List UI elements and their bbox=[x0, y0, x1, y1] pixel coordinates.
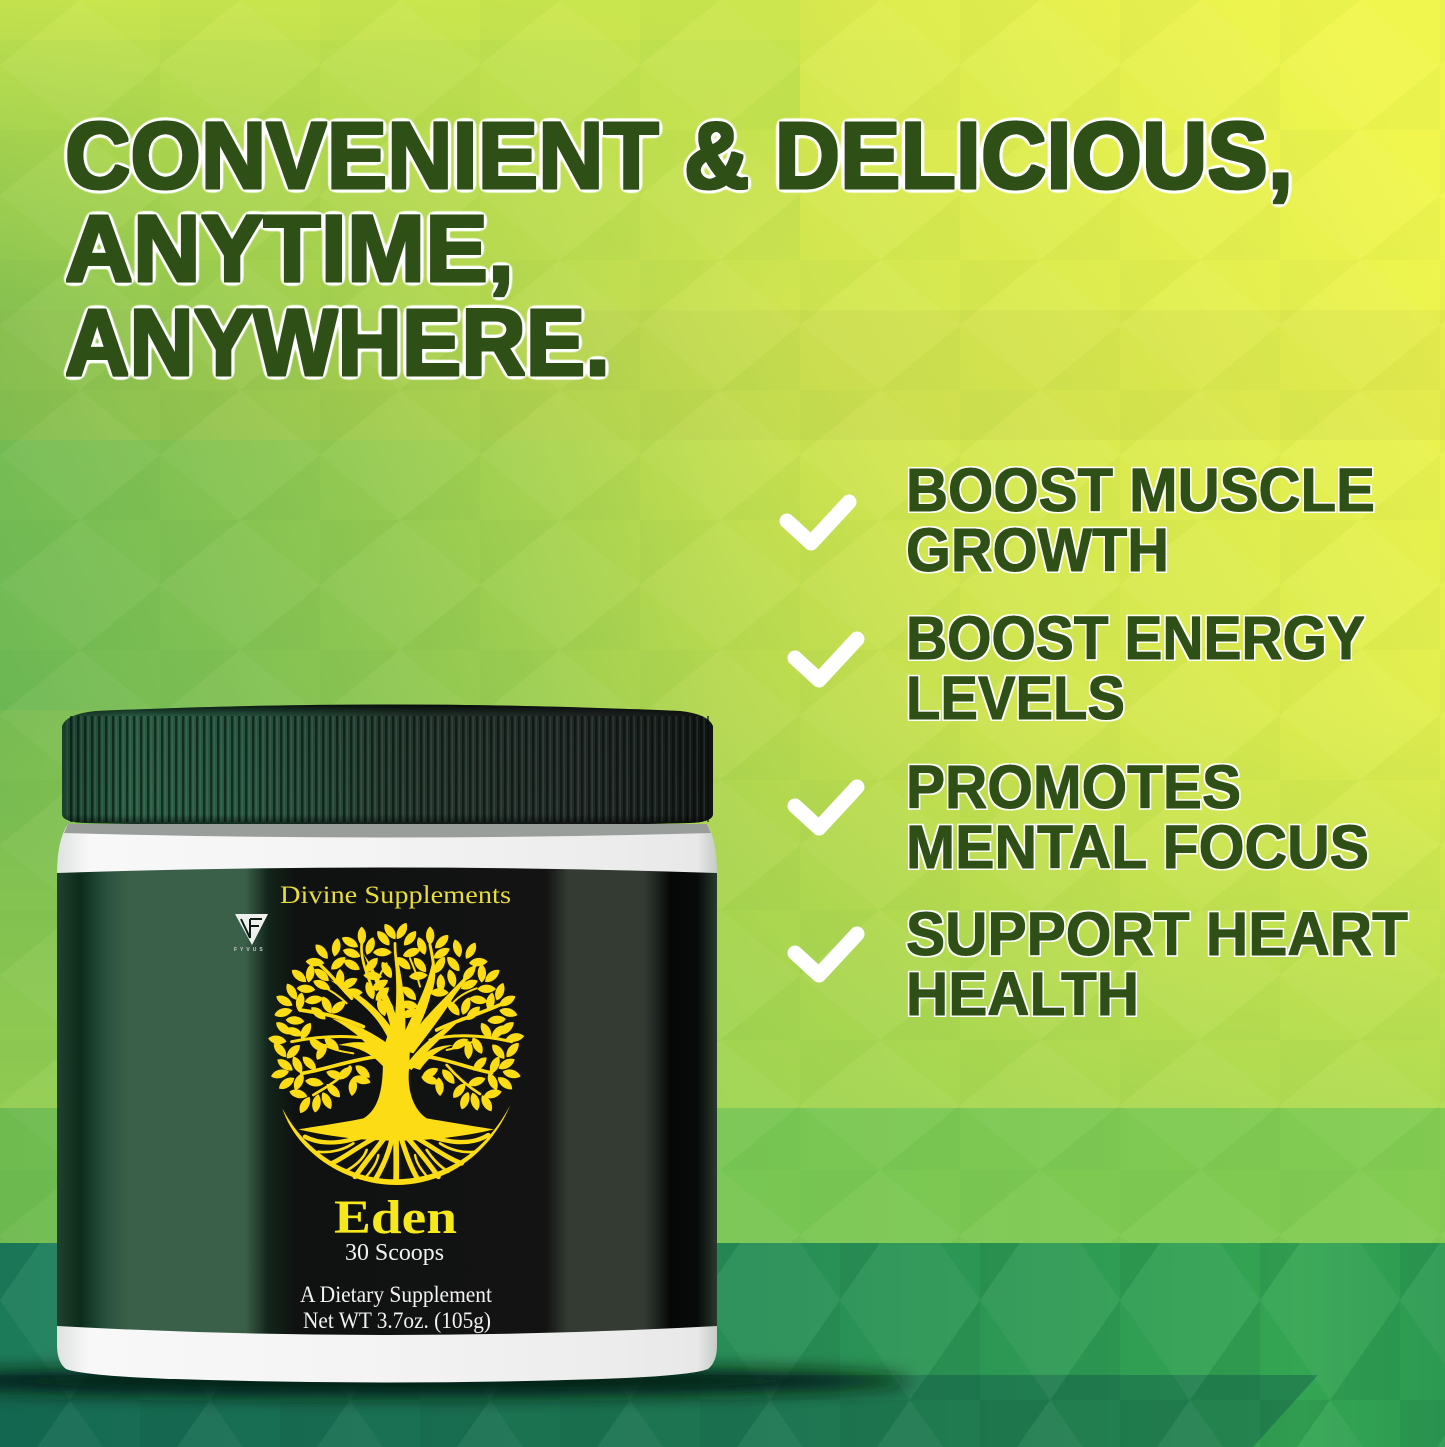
leaves bbox=[267, 921, 525, 1115]
jar white base bbox=[57, 1322, 717, 1382]
benefit: boost energy levels: LEVELS bbox=[906, 664, 1125, 732]
benefit: boost muscle growth bbox=[906, 456, 1375, 584]
benefit: boost muscle growth: BOOST MUSCLE bbox=[906, 456, 1375, 524]
icon: check mark 2 bbox=[795, 639, 857, 680]
brand name: Divine Supplements bbox=[280, 882, 511, 909]
benefit: promotes mental focus bbox=[906, 753, 1369, 881]
benefit: boost muscle growth: GROWTH bbox=[906, 516, 1169, 584]
tree of life emblem bbox=[267, 921, 525, 1185]
heading: convenient and delicious: ANYWHERE. bbox=[65, 290, 610, 396]
benefit: support heart health bbox=[906, 900, 1408, 1028]
roots bbox=[305, 1133, 488, 1182]
jar lid bbox=[62, 704, 713, 826]
net weight: Net WT 3.7oz. (105g) bbox=[303, 1308, 491, 1333]
scoop count: 30 Scoops bbox=[345, 1240, 444, 1266]
heading: convenient and delicious: ANYTIME, bbox=[65, 196, 514, 302]
benefit: boost energy levels: BOOST ENERGY bbox=[906, 604, 1365, 672]
product jar bbox=[57, 704, 717, 1382]
icon: check mark 3 bbox=[795, 787, 857, 828]
benefit: support heart health: SUPPORT HEART bbox=[906, 900, 1408, 968]
benefits checklist bbox=[787, 456, 1408, 1028]
supplement note: A Dietary Supplement bbox=[300, 1282, 493, 1307]
icon: check mark 4 bbox=[795, 934, 857, 975]
heading: convenient and delicious: CONVENIENT & DELICIOUS, bbox=[65, 103, 1293, 209]
heading: convenient and delicious bbox=[65, 103, 1293, 396]
benefit: support heart health: HEALTH bbox=[906, 960, 1139, 1028]
benefit: promotes mental focus: PROMOTES bbox=[906, 753, 1241, 821]
jar white neck band bbox=[57, 824, 717, 874]
jar shadow on surface bbox=[0, 1366, 910, 1396]
benefit: boost energy levels bbox=[906, 604, 1365, 732]
product name: Eden bbox=[334, 1191, 457, 1244]
trunk and ground bbox=[298, 1033, 494, 1141]
icon: check mark 1 bbox=[787, 502, 849, 543]
branches bbox=[292, 943, 512, 1095]
jar label bbox=[57, 868, 717, 1335]
main limbs bbox=[330, 945, 465, 1070]
root crescent bbox=[282, 1105, 510, 1185]
benefit: promotes mental focus: MENTAL FOCUS bbox=[906, 813, 1369, 881]
icon: FV logo: FYVUS bbox=[234, 947, 266, 953]
icon: FV logo bbox=[234, 914, 268, 953]
